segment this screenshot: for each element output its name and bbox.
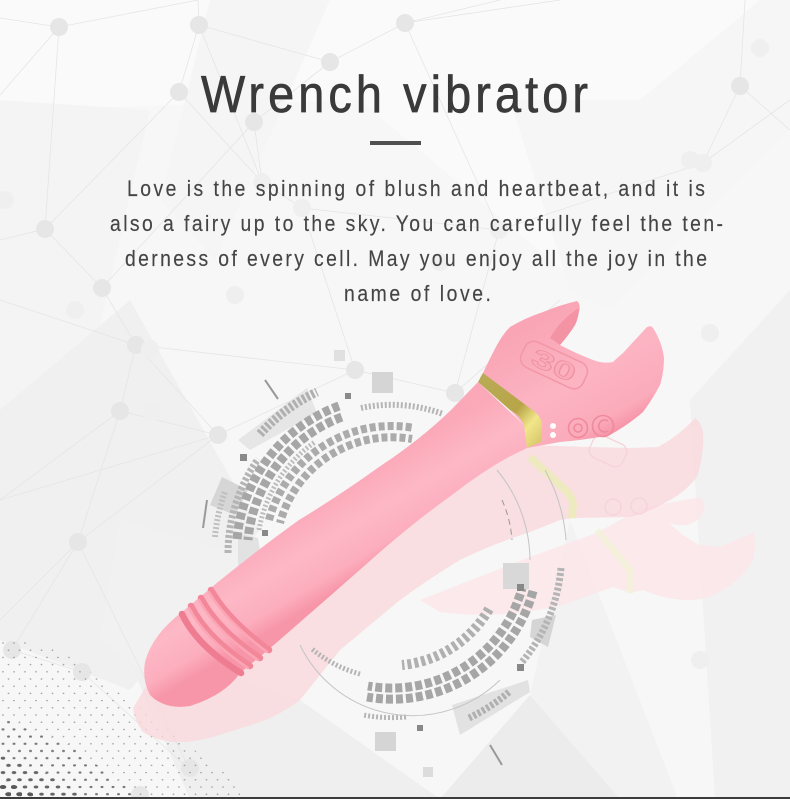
- indicator dots: [550, 423, 556, 438]
- jaw shadow: [550, 308, 579, 345]
- bottom edge: [0, 797, 790, 799]
- wrench head: [480, 301, 664, 448]
- tread squares: [203, 350, 529, 777]
- body text: [110, 177, 723, 306]
- tread panels: [210, 388, 556, 735]
- gold band: [478, 373, 542, 448]
- title divider: [370, 141, 421, 145]
- halftone dots: [0, 635, 240, 797]
- ghost band: second: [597, 530, 630, 593]
- shaft: [144, 382, 527, 707]
- capacity badge: 30: [527, 343, 580, 388]
- ghost buttons: [587, 433, 647, 515]
- body text: also a fairy up to the sky. You can carefully feel the ten-: [110, 212, 723, 236]
- ghost reflection: first: [133, 418, 703, 742]
- body text: derness of every cell. May you enjoy all the joy in the: [125, 247, 707, 271]
- product: wrench vibrator: [144, 301, 664, 707]
- tread arc: upper left: [215, 392, 443, 553]
- thin outer rings: [300, 470, 566, 716]
- tread arc: lower right: [312, 568, 561, 718]
- title: Wrench vibrator: [201, 66, 588, 124]
- ribs: [182, 590, 269, 673]
- body text: Love is the spinning of blush and heartbeat, and it is: [127, 177, 705, 201]
- ghost band: first: [530, 457, 573, 518]
- capacity badge: [517, 338, 591, 393]
- body text: name of love.: [344, 282, 491, 306]
- circular tread graphic: [210, 388, 566, 735]
- ghost reflection: second: [420, 497, 755, 615]
- control buttons: [568, 416, 614, 438]
